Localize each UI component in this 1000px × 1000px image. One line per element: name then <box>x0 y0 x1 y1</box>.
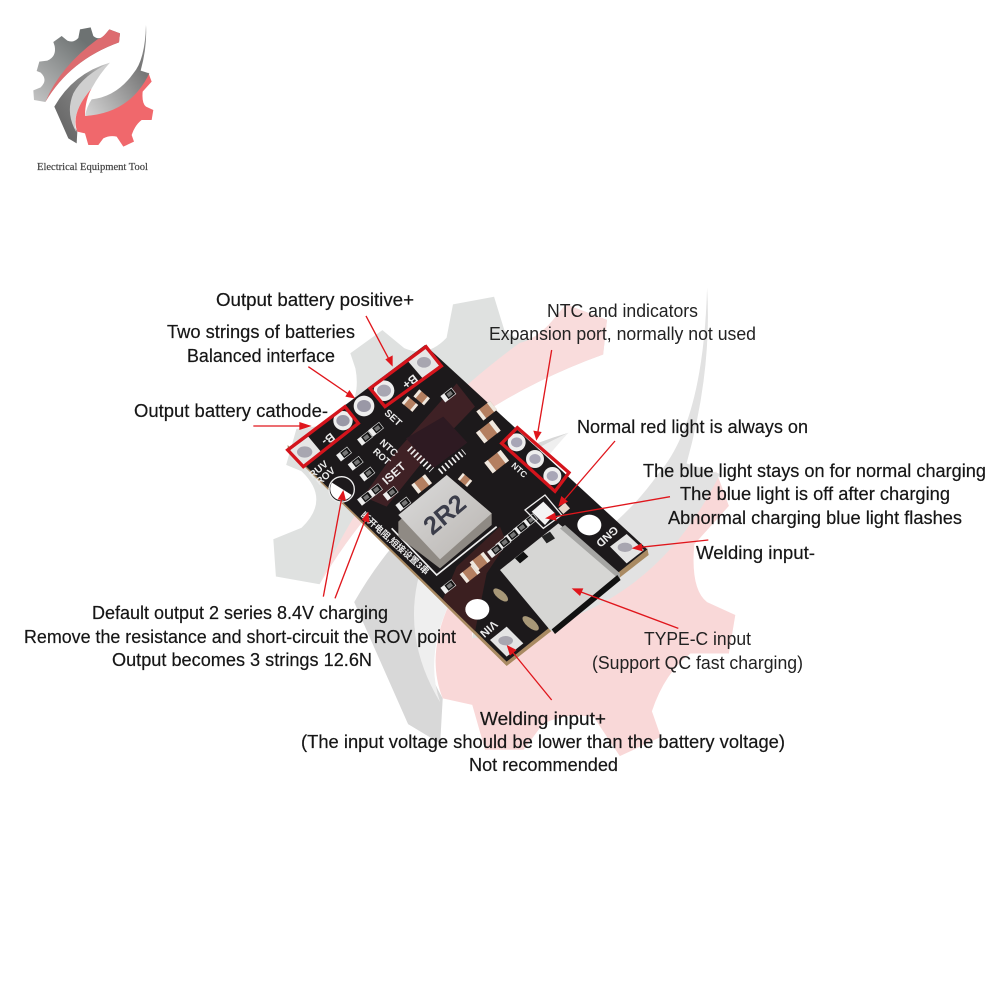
silkscreen labels: NTC <box>509 460 530 480</box>
label: blue light behaviour: The blue light is off after charging <box>680 483 950 504</box>
silkscreen labels: B+ <box>400 371 420 392</box>
arrow: blue light <box>545 497 670 521</box>
label: type-c input <box>592 629 803 673</box>
red highlight boxes around terminals <box>288 347 569 491</box>
label: blue light behaviour: Abnormal charging blue light flashes <box>668 507 962 528</box>
label: welding input plus: Not recommended <box>469 754 618 775</box>
ROV jumper pad <box>329 477 354 502</box>
label: type-c input: (Support QC fast charging) <box>592 653 803 673</box>
translucent maroon areas <box>363 383 507 640</box>
arrow: output battery cathode <box>253 422 312 430</box>
label: NTC and indicators: NTC and indicators <box>547 301 698 321</box>
inductor marking: 2R2 <box>418 489 472 541</box>
silkscreen labels: ROT <box>371 446 393 467</box>
silkscreen labels: ROV <box>314 465 338 488</box>
leader arrows <box>253 316 708 700</box>
label: output battery cathode: Output battery cathode- <box>134 400 328 421</box>
logo caption: Electrical Equipment Tool <box>37 162 148 173</box>
label: balanced interface <box>167 321 355 366</box>
arrow: NTC and indicators <box>533 350 552 441</box>
arrow: welding input plus <box>507 645 552 700</box>
label: welding input plus: Welding input+ <box>480 708 606 729</box>
arrow: welding input minus <box>632 540 708 551</box>
silkscreen labels: RUV <box>307 459 331 481</box>
label: normal red light: Normal red light is always on <box>577 416 808 437</box>
label: balanced interface: Balanced interface <box>187 345 335 366</box>
pads and holes <box>290 348 644 657</box>
board edge <box>288 445 649 666</box>
arrow: balanced interface <box>308 367 355 399</box>
arrow: output battery positive <box>366 316 393 367</box>
label: default output configuration: Output becomes 3 strings 12.6N <box>112 649 372 670</box>
label: blue light behaviour <box>643 460 986 528</box>
silkscreen labels: NTC <box>377 437 400 459</box>
silkscreen labels: ISET <box>379 459 409 487</box>
logo: Electrical Equipment Tool gear mark <box>33 25 153 173</box>
silkscreen labels: VIN <box>477 618 499 639</box>
label: type-c input: TYPE-C input <box>644 629 751 649</box>
label: default output configuration: Remove the resistance and short-circuit the ROV point <box>24 626 456 647</box>
label: welding input plus <box>301 708 785 775</box>
label: output battery positive: Output battery positive+ <box>216 289 414 310</box>
microcontroller chip <box>406 417 467 468</box>
watermark: large faded gear behind board <box>273 288 735 756</box>
USB Type-C connector <box>491 523 621 634</box>
silkscreen labels: GND <box>593 523 620 549</box>
status LED block <box>525 495 570 528</box>
arrow: normal red light <box>558 441 615 507</box>
arrow: ROV resistor <box>323 490 346 597</box>
ceramic capacitors <box>402 389 509 583</box>
label: default output configuration <box>24 602 456 670</box>
board top face <box>288 345 647 662</box>
resistors and small components <box>336 388 538 594</box>
label: default output configuration: Default output 2 series 8.4V charging <box>92 602 388 623</box>
label: blue light behaviour: The blue light stays on for normal charging <box>643 460 986 481</box>
label: NTC and indicators: Expansion port, normally not used <box>489 324 756 344</box>
arrow: type-c input <box>572 588 678 628</box>
circuit board module <box>288 345 649 666</box>
label: welding input plus: (The input voltage should be lower than the battery voltage) <box>301 731 785 752</box>
silkscreen labels <box>307 371 620 639</box>
silkscreen labels: 断开电阻,短接设置3串 <box>359 509 432 577</box>
arrow: ROV point <box>335 512 369 598</box>
label: NTC and indicators <box>489 301 756 344</box>
label: welding input minus: Welding input- <box>696 542 815 563</box>
silkscreen labels: B- <box>319 430 338 449</box>
inductor 2R2 <box>392 475 497 575</box>
silkscreen labels: SET <box>382 408 404 429</box>
label: balanced interface: Two strings of batteries <box>167 321 355 342</box>
